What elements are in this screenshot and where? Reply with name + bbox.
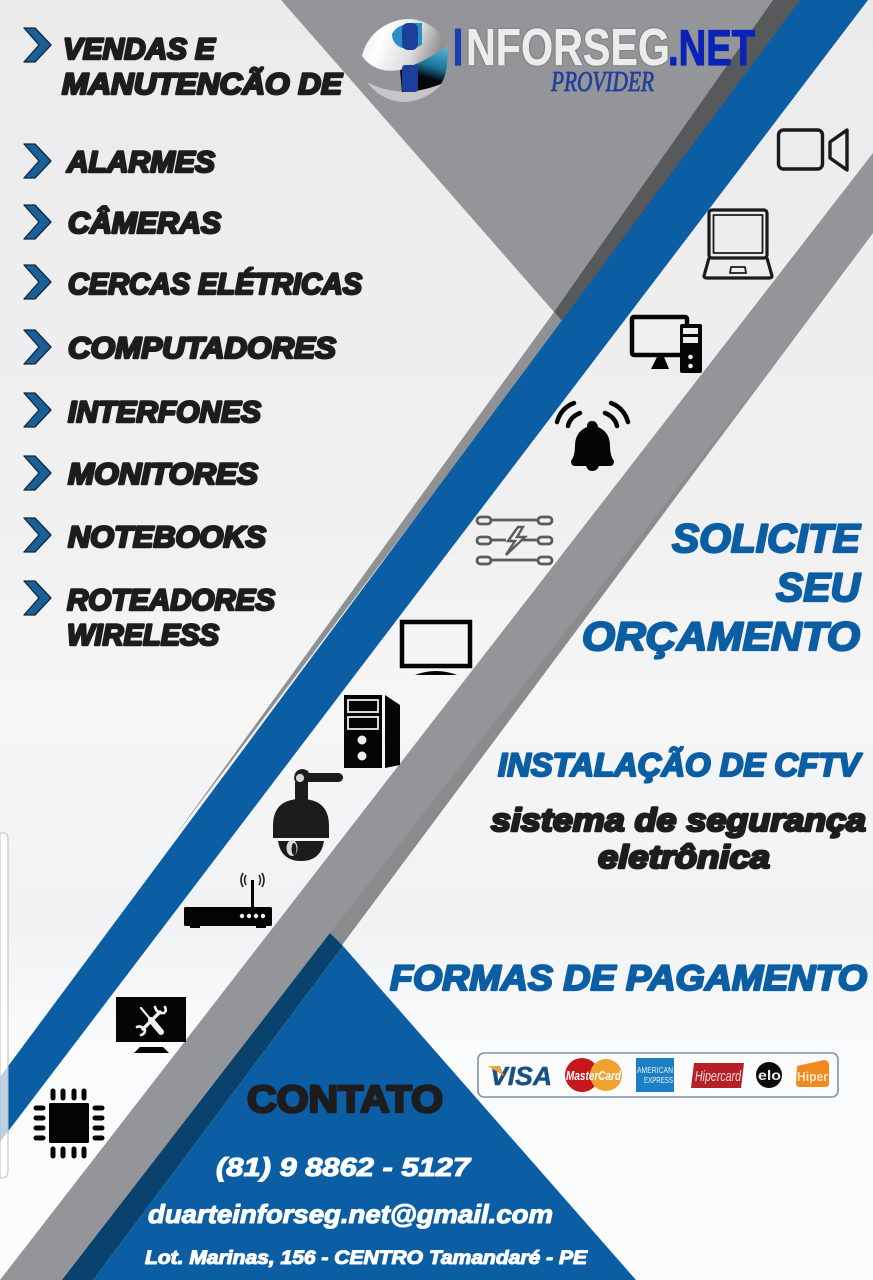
mastercard logo: MasterCard <box>566 1068 622 1083</box>
hiper logo <box>796 1060 829 1087</box>
heading: instalação de cftv: INSTALAÇÃO DE CFTV <box>498 747 863 783</box>
text: sistema de segurança eletrônica <box>491 802 866 875</box>
panel: services list <box>24 28 362 652</box>
text: phone: (81) 9 8862 - 5127 <box>216 1152 472 1182</box>
icon: repair monitor <box>116 997 186 1053</box>
heading: solicite seu orçamento: ORÇAMENTO <box>582 615 860 659</box>
text: sistema de segurança eletrônica: sistema de segurança <box>491 802 866 838</box>
american express logo: AMERICAN <box>637 1066 673 1075</box>
item: interfones: INTERFONES <box>68 396 261 429</box>
heading: solicite seu orçamento: SEU <box>776 566 861 610</box>
hiper logo: Hiper <box>797 1069 828 1084</box>
icon: video camera <box>778 130 847 170</box>
logo subtitle: PROVIDER <box>550 67 654 98</box>
heading: solicite seu orçamento <box>582 517 861 659</box>
american express logo <box>636 1058 674 1092</box>
hipercard logo: Hipercard <box>695 1068 741 1085</box>
logo wordmark: I <box>453 19 463 77</box>
hipercard logo <box>691 1063 744 1088</box>
logo wordmark: .NET <box>668 20 755 76</box>
logo <box>362 19 755 102</box>
item: câmeras: CÂMERAS <box>68 206 221 240</box>
item: monitores: MONITORES <box>68 458 258 491</box>
darker stripe on gray band <box>330 380 762 945</box>
logo sphere <box>362 19 447 102</box>
icon: alarm bell <box>557 403 628 471</box>
thin gray stripe along blue band <box>172 312 563 840</box>
icon: electric fence <box>477 517 552 564</box>
heading: vendas e manutenção de: VENDAS E <box>63 33 216 66</box>
text: sistema de segurança eletrônica: eletrônica <box>598 839 770 875</box>
navy stripe <box>62 933 343 1280</box>
item: alarmes: ALARMES <box>66 146 215 179</box>
heading: formas de pagamento: FORMAS DE PAGAMENTO <box>390 959 867 998</box>
icon: television <box>402 622 470 675</box>
icon: laptop <box>704 210 772 278</box>
heading: contato: CONTATO <box>247 1079 443 1121</box>
heading: solicite seu orçamento: SOLICITE <box>672 517 861 561</box>
item: roteadores wireless <box>67 584 275 652</box>
logo wordmark: NFORSEG <box>466 19 670 77</box>
item: roteadores wireless: ROTEADORES <box>67 584 275 617</box>
elo logo <box>756 1062 782 1088</box>
blue triangle: contact panel <box>93 946 636 1280</box>
text: address: Lot. Marinas, 156 - CENTRO Tamandaré - PE <box>145 1248 588 1269</box>
dark gray stripe <box>554 0 802 322</box>
mastercard logo <box>565 1058 622 1092</box>
icon: pc tower <box>344 695 400 768</box>
text: email: duarteinforseg.net@gmail.com <box>148 1199 553 1229</box>
item: computadores: COMPUTADORES <box>68 332 336 365</box>
heading: vendas e manutenção de <box>62 33 343 101</box>
icon: wifi router <box>184 873 272 928</box>
screenshot tab at left edge <box>0 833 8 1178</box>
chevrons <box>24 28 51 615</box>
elo logo: elo <box>758 1067 781 1083</box>
heading: vendas e manutenção de: MANUTENCÃO DE <box>62 67 343 101</box>
visa logo: VISA <box>490 1061 552 1091</box>
icon: microchip <box>36 1091 102 1156</box>
icon: dome camera <box>273 769 343 861</box>
panel: payment methods <box>478 1053 838 1097</box>
icon: desktop computer <box>632 317 702 373</box>
gray triangle top <box>281 0 782 312</box>
item: roteadores wireless: WIRELESS <box>67 619 219 652</box>
item: notebooks: NOTEBOOKS <box>68 521 266 554</box>
american express logo: EXPRESS <box>644 1076 673 1085</box>
item: cercas elétricas: CERCAS ELÉTRICAS <box>68 267 362 301</box>
